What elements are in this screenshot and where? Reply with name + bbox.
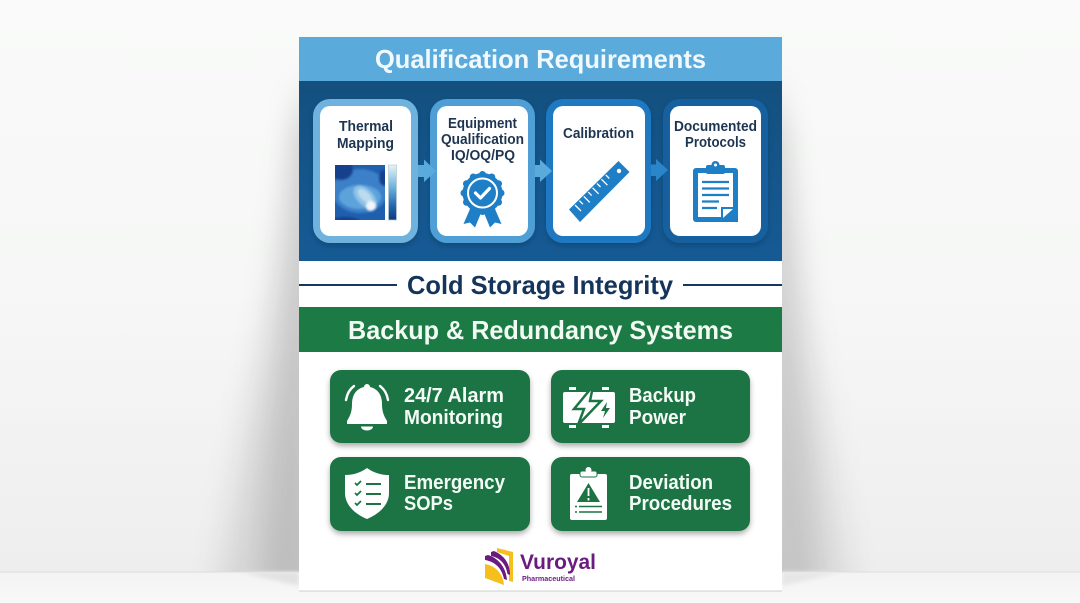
arrow: step 1 to 2 xyxy=(418,160,436,182)
step card: Equipment Qualification: Equipment xyxy=(448,116,517,132)
card: Backup Power: Backup xyxy=(629,385,696,407)
card: Emergency SOPs: SOPs xyxy=(404,493,453,515)
arrow: step 3 to 4 xyxy=(651,159,668,181)
legend: colour bar xyxy=(388,165,396,220)
step card: Documented Protocols: Protocols xyxy=(685,135,746,151)
logo: Vuroyal Pharmaceutical: Vuroyal xyxy=(520,551,596,574)
step card: Equipment Qualification: IQ/OQ/PQ xyxy=(451,148,515,164)
card: Emergency SOPs: Emergency xyxy=(404,472,506,494)
step card: Equipment Qualification xyxy=(430,99,535,246)
heading: Cold Storage Integrity: Cold Storage Integrity xyxy=(407,270,674,300)
card: Deviation Procedures xyxy=(551,457,750,534)
chart: heat map xyxy=(335,165,385,220)
header: Backup & Redundancy Systems: Backup & Redundancy Systems xyxy=(348,315,733,345)
arrow: step 2 to 3 xyxy=(535,160,552,182)
logo: Vuroyal Pharmaceutical xyxy=(485,548,596,585)
card: Deviation Procedures: Deviation xyxy=(629,472,713,494)
icon: battery with lightning xyxy=(563,386,615,428)
card: 24/7 Alarm Monitoring: Monitoring xyxy=(404,407,503,429)
icon: bell xyxy=(346,384,388,430)
header: Qualification Requirements xyxy=(299,37,782,81)
step card: Thermal Mapping: Mapping xyxy=(337,136,394,152)
step card: Thermal Mapping: Thermal xyxy=(339,119,393,135)
icon: ruler xyxy=(569,161,630,222)
step card: Equipment Qualification: Qualification xyxy=(441,132,524,148)
step card: Documented Protocols xyxy=(663,99,768,246)
card: Backup Power: Power xyxy=(629,407,686,429)
logo: Vuroyal Pharmaceutical: Pharmaceutical xyxy=(522,574,575,583)
icon: clipboard document xyxy=(693,161,738,222)
icon: clipboard warning xyxy=(570,467,607,520)
card: Deviation Procedures: Procedures xyxy=(629,493,732,515)
poster xyxy=(299,37,782,592)
panel: qualification steps xyxy=(299,81,782,261)
icon: shield checklist xyxy=(345,468,389,519)
step card: Calibration: Calibration xyxy=(563,126,634,142)
card: 24/7 Alarm Monitoring: 24/7 Alarm xyxy=(404,385,504,407)
step card: Calibration xyxy=(546,99,651,246)
icon: award ribbon xyxy=(460,171,504,228)
card: Emergency SOPs xyxy=(330,457,530,534)
step card: Thermal Mapping xyxy=(313,99,418,246)
header: Backup & Redundancy Systems xyxy=(299,307,782,352)
step card: Documented Protocols: Documented xyxy=(674,119,757,135)
header: Qualification Requirements: Qualification Requirements xyxy=(375,44,706,74)
card: 24/7 Alarm Monitoring xyxy=(330,370,530,446)
card: Backup Power xyxy=(551,370,750,446)
